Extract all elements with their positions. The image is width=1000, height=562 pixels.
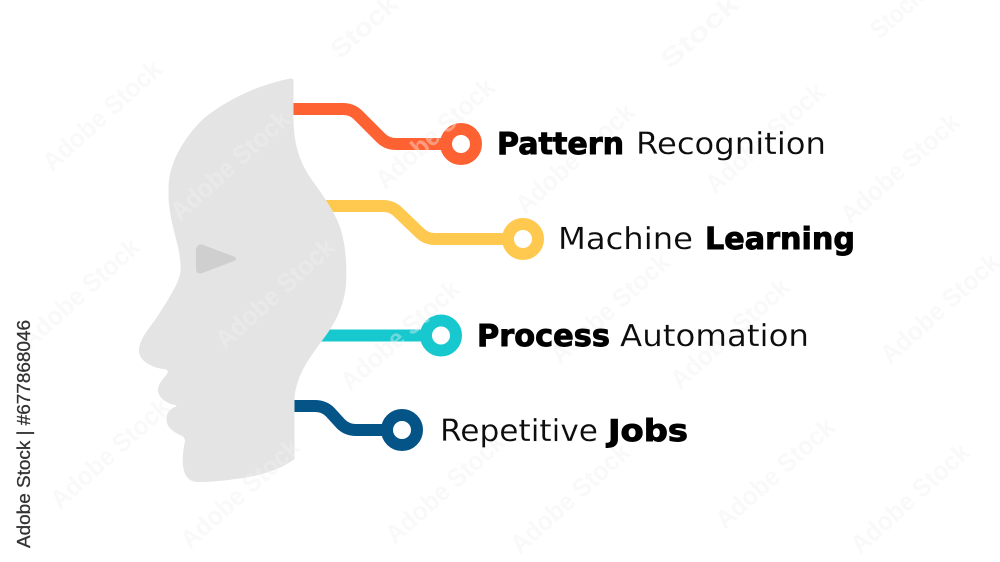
- watermark pattern: Adobe Stock: [509, 96, 641, 219]
- watermark pattern: Adobe Stock: [379, 426, 511, 549]
- watermark pattern: Adobe Stock: [14, 231, 146, 354]
- label: Process Automation: [477, 319, 809, 354]
- watermark pattern: Adobe Stock: [544, 246, 676, 369]
- label: Pattern Recognition: [497, 127, 826, 162]
- label: Repetitive Jobs: Jobs: [606, 414, 688, 449]
- label: Process Automation: Automation: [620, 319, 809, 354]
- watermark pattern: Adobe Stock: [36, 53, 168, 176]
- connector: teal line and ring: [315, 320, 456, 350]
- label: Machine Learning: Learning: [705, 222, 855, 257]
- watermark pattern: Adobe Stock: [709, 411, 841, 534]
- label: Repetitive Jobs: Repetitive: [440, 414, 598, 449]
- watermark pattern: Adobe Stock: [844, 436, 976, 559]
- connector: yellow line and ring: [320, 206, 538, 254]
- watermark pattern: Adobe Stock: [504, 436, 636, 559]
- watermark pattern: Adobe Stock: [174, 431, 306, 554]
- watermark pattern: Adobe Stock: [44, 391, 176, 514]
- watermark pattern: Adobe Stock: [699, 76, 831, 199]
- watermark pattern: Stock: [654, 0, 745, 74]
- watermark pattern: Adobe Stock: [664, 271, 796, 394]
- label: Pattern Recognition: Recognition: [636, 127, 826, 162]
- head profile silhouette: [139, 78, 346, 482]
- label: Pattern Recognition: Pattern: [497, 127, 624, 162]
- label: Process Automation: Process: [477, 319, 610, 354]
- connector: orange line and ring: [293, 109, 476, 159]
- watermark pattern: Adobe Stock: [334, 273, 466, 396]
- connector: blue line and ring: [293, 406, 417, 445]
- watermark pattern: Adobe Stock: [209, 231, 341, 354]
- watermark pattern: Adobe Stock: [834, 106, 966, 229]
- label: Repetitive Jobs: [440, 414, 688, 449]
- icon: triangular eye: [196, 244, 236, 274]
- label: Machine Learning: [558, 222, 855, 257]
- watermark pattern: Adobe Stock: [369, 71, 501, 194]
- watermark pattern: Adobe Stock: [164, 103, 296, 226]
- label: Machine Learning: Machine: [558, 222, 693, 257]
- side credit text: Adobe Stock | #677868046: [14, 320, 34, 548]
